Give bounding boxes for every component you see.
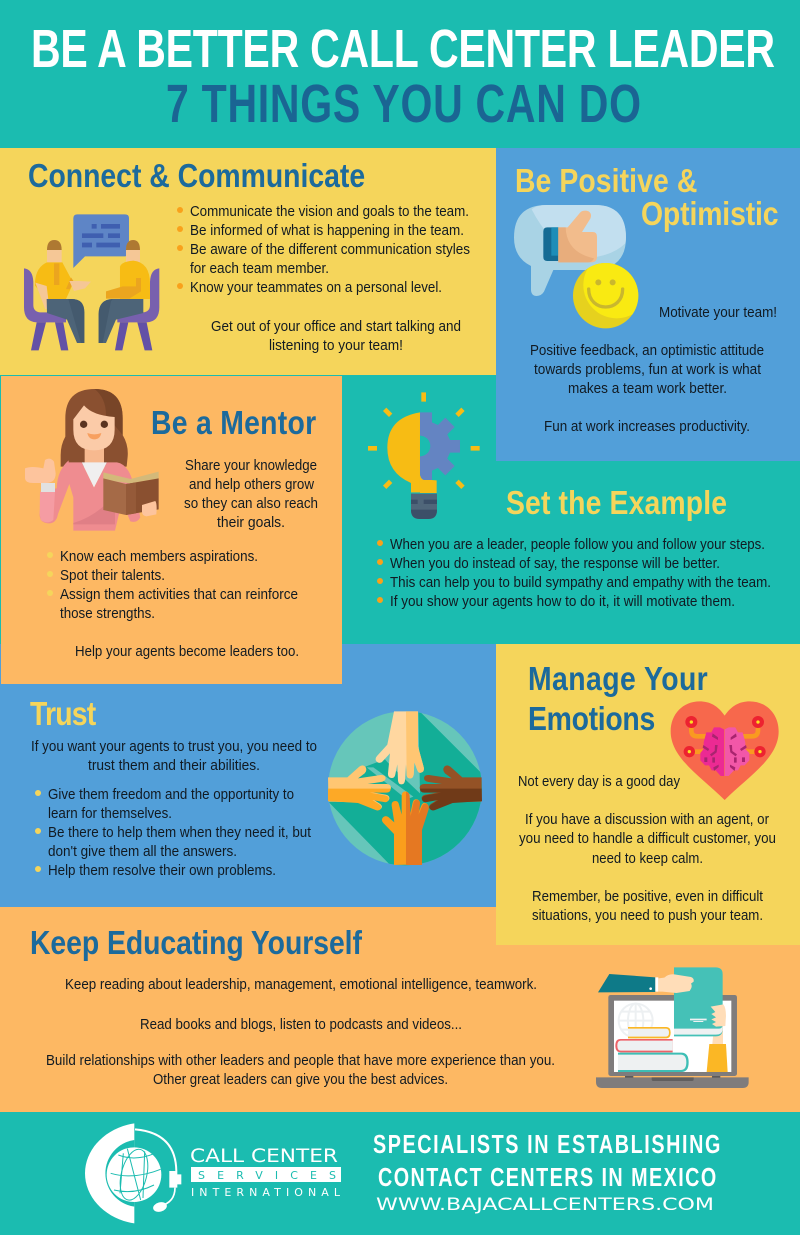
text: help your agents: Help your agents become leaders too. (75, 643, 299, 660)
title: BE A BETTER CALL CENTER LEADER (31, 20, 775, 79)
bullet list: mentor: Spot their talents. (60, 567, 165, 584)
footer band (85, 1123, 720, 1223)
bullet list: mentor: Know each members aspirations. (60, 548, 258, 565)
heading: be positive: Be Positive & (515, 162, 697, 200)
logo bar: services: SERVICES (198, 1169, 336, 1182)
icon: heart with brain (671, 701, 779, 800)
heading: manage your emotions (528, 660, 708, 738)
heading: be positive (515, 162, 779, 233)
heading: trust: Trust (30, 695, 96, 733)
text: keep reading: Read books and blogs, listen to podcasts and videos... (140, 1016, 462, 1033)
logo text: call center: CALL CENTER (190, 1145, 338, 1167)
text: positive feedback: towards problems, fun at work is what (534, 361, 762, 378)
bullet list: connect: Be aware of the different communication styles (190, 241, 470, 258)
panel: mentor background (1, 376, 342, 684)
heading: set the example: Set the Example (506, 484, 727, 522)
heading: keep educating: Keep Educating Yourself (30, 924, 363, 962)
logo text: international: INTERNATIONAL (191, 1186, 341, 1199)
bullet list: connect: Be informed of what is happening in the team. (190, 222, 464, 239)
bullet list: connect (177, 203, 470, 296)
text: keep reading: Build relationships with other leaders and people that have more experience than you. (46, 1052, 555, 1069)
icon: two people talking (24, 214, 159, 350)
panel: connect and communicate (24, 157, 470, 354)
icon: thumbs up and smiley (514, 205, 650, 328)
text: keep calm: need to keep calm. (592, 850, 703, 867)
text: share your knowledge: so they can also reach (184, 495, 318, 512)
text: trust intro: trust them and their abilities. (88, 757, 260, 774)
bullet list: connect: Communicate the vision and goals to the team. (190, 203, 469, 220)
bullet list: mentor: Assign them activities that can reinforce (60, 586, 298, 603)
text: get out of your office: Get out of your office and start talking and (211, 318, 461, 335)
text: get out of your office (211, 318, 461, 354)
text: share your knowledge: their goals. (217, 514, 285, 531)
icon: woman holding a book (25, 389, 159, 531)
panel: positive background (496, 148, 800, 461)
title (31, 20, 775, 134)
panel: connect background (0, 148, 496, 375)
panel: manage your emotions (518, 660, 779, 924)
text: trust intro: If you want your agents to trust you, you need to (31, 738, 317, 755)
panel: trust (30, 695, 487, 879)
panel: emotions background (496, 644, 800, 945)
bullet list: connect: Know your teammates on a personal level. (190, 279, 442, 296)
text: remember: situations, you need to push your team. (532, 907, 763, 924)
heading: manage your emotions: Manage Your (528, 660, 708, 698)
footer text: WWW.BAJACALLCENTERS.COM (376, 1195, 714, 1214)
bullet list: example: When you do instead of say, the response will be better. (390, 555, 720, 572)
bullet list: trust: Give them freedom and the opportunity to (48, 786, 294, 803)
bullet list: trust: Be there to help them when they need it, but (48, 824, 312, 841)
text: keep calm: If you have a discussion with an agent, or (525, 811, 769, 828)
text: get out of your office: listening to your team! (269, 337, 403, 354)
text: positive feedback (530, 342, 764, 435)
footer text: CONTACT CENTERS IN MEXICO (378, 1162, 716, 1192)
bullet list: trust (35, 786, 312, 879)
text: positive feedback: Positive feedback, an optimistic attitude (530, 342, 764, 359)
text: keep reading: Other great leaders can give you the best advices. (153, 1071, 448, 1088)
text: remember: Remember, be positive, even in difficult (532, 888, 764, 905)
text: positive feedback: makes a team work better. (568, 380, 727, 397)
text: share your knowledge (184, 457, 318, 531)
bullet list: connect: for each team member. (190, 260, 329, 277)
text: keep reading: Keep reading about leadership, management, emotional intelligence, teamwork. (65, 976, 537, 993)
text: keep calm: you need to handle a difficult customer, you (519, 830, 776, 847)
logo: call center services international (85, 1123, 341, 1223)
text: trust intro (31, 738, 317, 774)
title: 7 THINGS YOU CAN DO (166, 75, 641, 134)
panel: keep educating yourself (30, 924, 749, 1088)
bullet list: trust: don't give them all the answers. (48, 843, 237, 860)
panel: be positive and optimistic (514, 162, 779, 435)
bullet list: mentor: those strengths. (60, 605, 155, 622)
heading: be a mentor: Be a Mentor (151, 404, 316, 442)
icon: headset and globe (85, 1123, 181, 1223)
panel: keep educating background (0, 907, 800, 1112)
text: not every day: Not every day is a good day (518, 773, 680, 790)
footer text: SPECIALISTS IN ESTABLISHING (373, 1129, 720, 1159)
heading: connect: Connect & Communicate (28, 157, 365, 195)
bullet list: trust: learn for themselves. (48, 805, 172, 822)
panel: trust background (0, 644, 496, 907)
text: positive feedback: Fun at work increases productivity. (544, 418, 750, 435)
text: remember (532, 888, 764, 924)
panel: be a mentor (25, 389, 318, 660)
bullet list: example (377, 536, 771, 610)
bullet list: mentor (47, 548, 298, 622)
bullet list: trust: Help them resolve their own problems. (48, 862, 276, 879)
heading: be positive: Optimistic (641, 195, 779, 233)
bullet list: example: If you show your agents how to do it, it will motivate them. (390, 593, 735, 610)
icon: four hands in a circle (327, 710, 487, 870)
icon: laptop with books (596, 967, 749, 1088)
footer text (373, 1129, 720, 1214)
text: share your knowledge: and help others grow (189, 476, 314, 493)
icon: light bulb with gear (368, 392, 480, 519)
text: keep reading (46, 976, 555, 1088)
heading: manage your emotions: Emotions (528, 700, 655, 738)
text: keep calm (519, 811, 776, 867)
text: motivate your team: Motivate your team! (659, 304, 777, 321)
panel: set the example (368, 392, 771, 610)
text: share your knowledge: Share your knowledge (185, 457, 317, 474)
